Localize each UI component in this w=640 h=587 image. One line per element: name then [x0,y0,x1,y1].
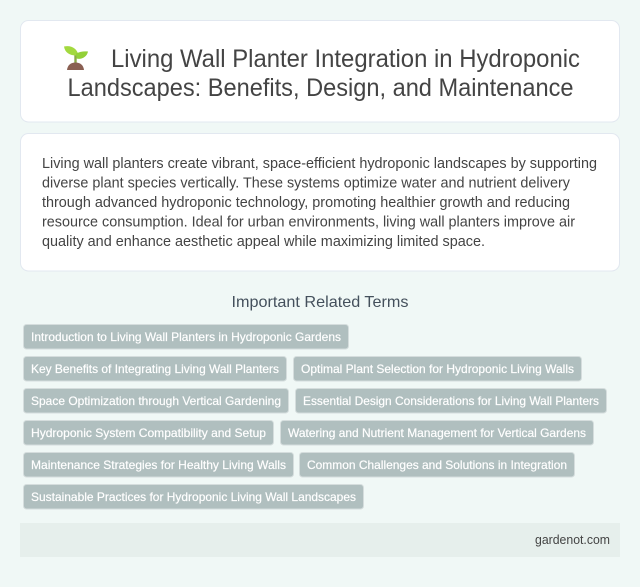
title line 2: Landscapes: Benefits, Design, and Maintenance [68,74,574,102]
tag: maintenance [24,452,294,477]
tag: design considerations [296,388,606,413]
tag: sustainable practices [24,484,364,509]
tag: design considerations: Essential Design Considerations for Living Wall Planters [303,394,599,408]
heading: important related terms: Important Related Terms [232,294,408,311]
tag: watering and nutrient: Watering and Nutrient Management for Vertical Gardens [288,426,586,440]
description text: Living wall planters create vibrant, space-efficient hydroponic landscapes by supporting [42,156,597,172]
tag: challenges: Common Challenges and Solutions in Integration [307,458,567,472]
description text: resource consumption. Ideal for urban environments, living wall planters improve air [42,214,575,230]
tag: watering and nutrient [280,420,594,445]
icon: seedling [64,46,88,70]
panel: title card [20,20,620,122]
tag: key benefits: Key Benefits of Integrating Living Wall Planters [31,362,279,376]
description text [42,156,597,250]
panel: description card [20,134,620,271]
description text: quality and enhance aesthetic appeal while maximizing limited space. [42,234,485,250]
tag: space optimization [24,388,288,413]
title line 1: Living Wall Planter Integration in Hydroponic [111,45,580,73]
tag: system compatibility [24,420,274,445]
tag: introduction: Introduction to Living Wall Planters in Hydroponic Gardens [31,330,341,344]
footer source text: gardenot.com [535,532,610,547]
tag: maintenance: Maintenance Strategies for Healthy Living Walls [31,458,286,472]
tag: plant selection: Optimal Plant Selection for Hydroponic Living Walls [301,362,574,376]
description text: diverse plant species vertically. These systems optimize water and nutrient delivery [42,176,571,192]
tag list [24,324,606,509]
description text: through advanced hydroponic technology, promoting healthier growth and reducing [42,195,570,211]
tag: sustainable practices: Sustainable Practices for Hydroponic Living Wall Landscapes [31,490,356,504]
tag: key benefits [24,356,286,381]
tag: space optimization: Space Optimization through Vertical Gardening [31,394,281,408]
tag: plant selection [294,356,582,381]
tag: introduction [24,324,348,349]
footer bar [20,523,620,557]
tag: challenges [300,452,574,477]
tag: system compatibility: Hydroponic System Compatibility and Setup [31,426,266,440]
